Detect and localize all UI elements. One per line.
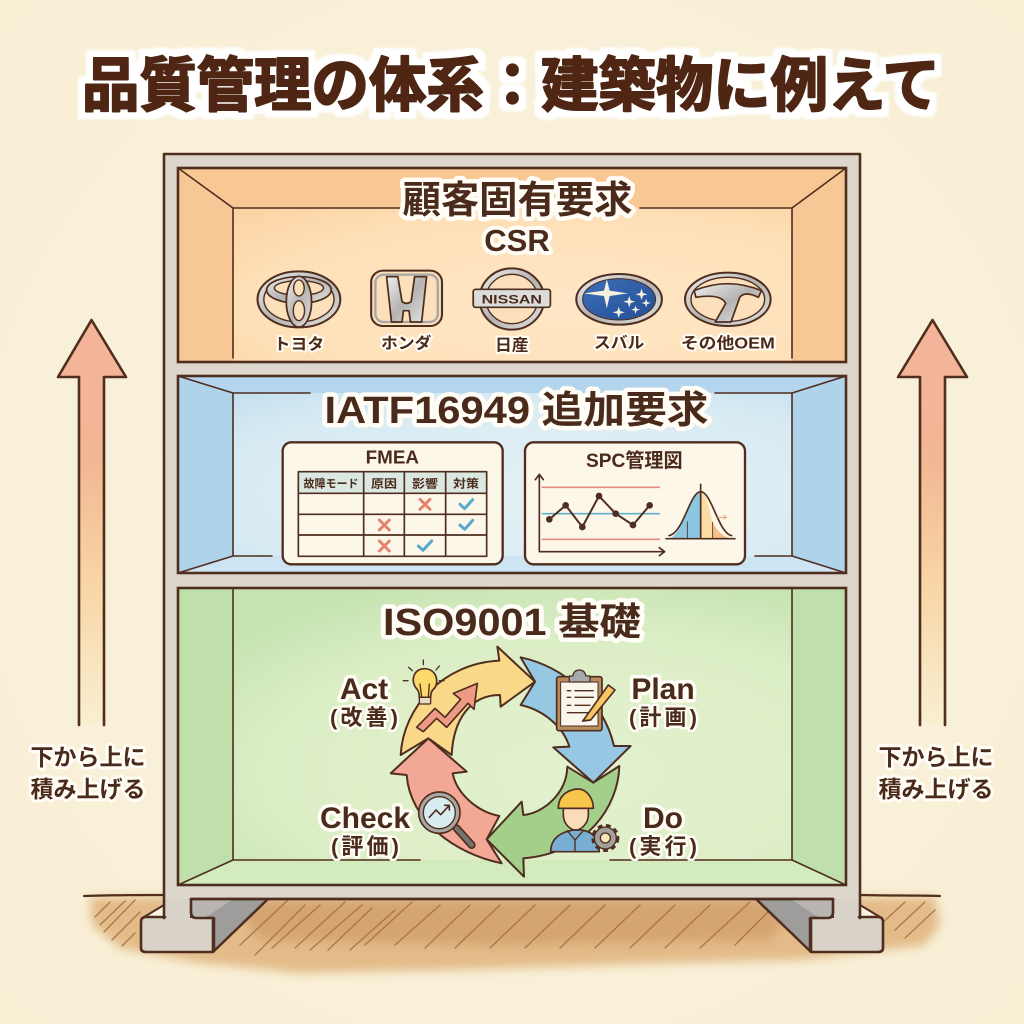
logo: Subaru (576, 274, 662, 352)
icon: magnifier (419, 792, 472, 845)
label: 日産 (495, 337, 529, 355)
panel: ISO9001 foundation (178, 588, 846, 885)
panel: customer specific requirements (178, 168, 846, 362)
label: スバル (594, 334, 644, 352)
left foundation footing (141, 880, 268, 952)
label: Do: (実行) (629, 834, 697, 859)
arrow: act (401, 647, 535, 755)
card: FMEA table (283, 442, 503, 564)
logo: Nissan: NISSAN (482, 293, 542, 306)
label: Check: (評価) (331, 834, 399, 859)
heading: ISO9001: ISO9001 基礎 (383, 602, 641, 644)
table header labels: 故障モード (303, 477, 358, 491)
table header labels (303, 477, 480, 491)
logo: Nissan (473, 268, 550, 355)
label: トヨタ (274, 336, 324, 353)
arrow: left upward (58, 320, 126, 725)
right foundation footing (756, 880, 883, 952)
logo: Honda (371, 271, 442, 353)
label: Act (330, 673, 398, 730)
icon: gear (594, 827, 617, 849)
control chart (535, 474, 665, 556)
caption: right (878, 744, 994, 802)
caption: left: 下から上に (30, 744, 146, 770)
icon: light bulb (403, 660, 444, 704)
caption: left: 積み上げる (30, 776, 146, 802)
caption: right: 下から上に (878, 744, 994, 770)
arrow: check (391, 738, 502, 863)
caption: left (30, 744, 146, 802)
label: Plan: (計画) (629, 705, 697, 730)
building frame (164, 154, 860, 918)
caption: right: 積み上げる (878, 776, 994, 802)
heading: IATF16949: IATF16949 追加要求 (324, 390, 708, 432)
heading: customer specific requirements: 顧客固有要求 (402, 180, 632, 222)
SPC heading: SPC管理図 (586, 449, 683, 472)
label: ホンダ (381, 334, 432, 353)
icon: clipboard (557, 670, 615, 731)
cards (283, 442, 745, 564)
arrow: plan (521, 657, 631, 783)
icon: worker (551, 789, 599, 852)
label: Do: Do (643, 802, 683, 835)
panel: IATF16949 additional requirements (178, 376, 846, 573)
heading: CSR: CSR (484, 223, 550, 258)
arrow: do (487, 766, 619, 877)
table header labels: 原因 (371, 478, 397, 491)
ground (84, 895, 940, 973)
icon: rising arrow (417, 683, 477, 732)
table header labels: 対策 (453, 477, 480, 491)
label: Plan (629, 673, 697, 730)
label: Act: (改善) (330, 705, 398, 730)
table marks (379, 499, 473, 551)
table header labels: 影響 (412, 477, 438, 491)
bell curve (666, 484, 735, 539)
arrow: right upward (898, 320, 967, 725)
label: Check: Check (320, 802, 410, 835)
label: その他OEM (681, 335, 775, 353)
logo: Toyota (258, 271, 340, 353)
label: Check (320, 802, 410, 859)
title: 品質管理の体系：建築物に例えて (82, 53, 940, 119)
logos row (258, 268, 775, 355)
logo: other OEM (681, 273, 775, 353)
PDCA cycle (391, 647, 631, 877)
label: Act: Act (340, 673, 388, 706)
label: Do (629, 802, 697, 859)
label: Plan: Plan (631, 673, 695, 706)
card: SPC control chart (525, 442, 745, 564)
FMEA heading: FMEA (366, 447, 419, 468)
